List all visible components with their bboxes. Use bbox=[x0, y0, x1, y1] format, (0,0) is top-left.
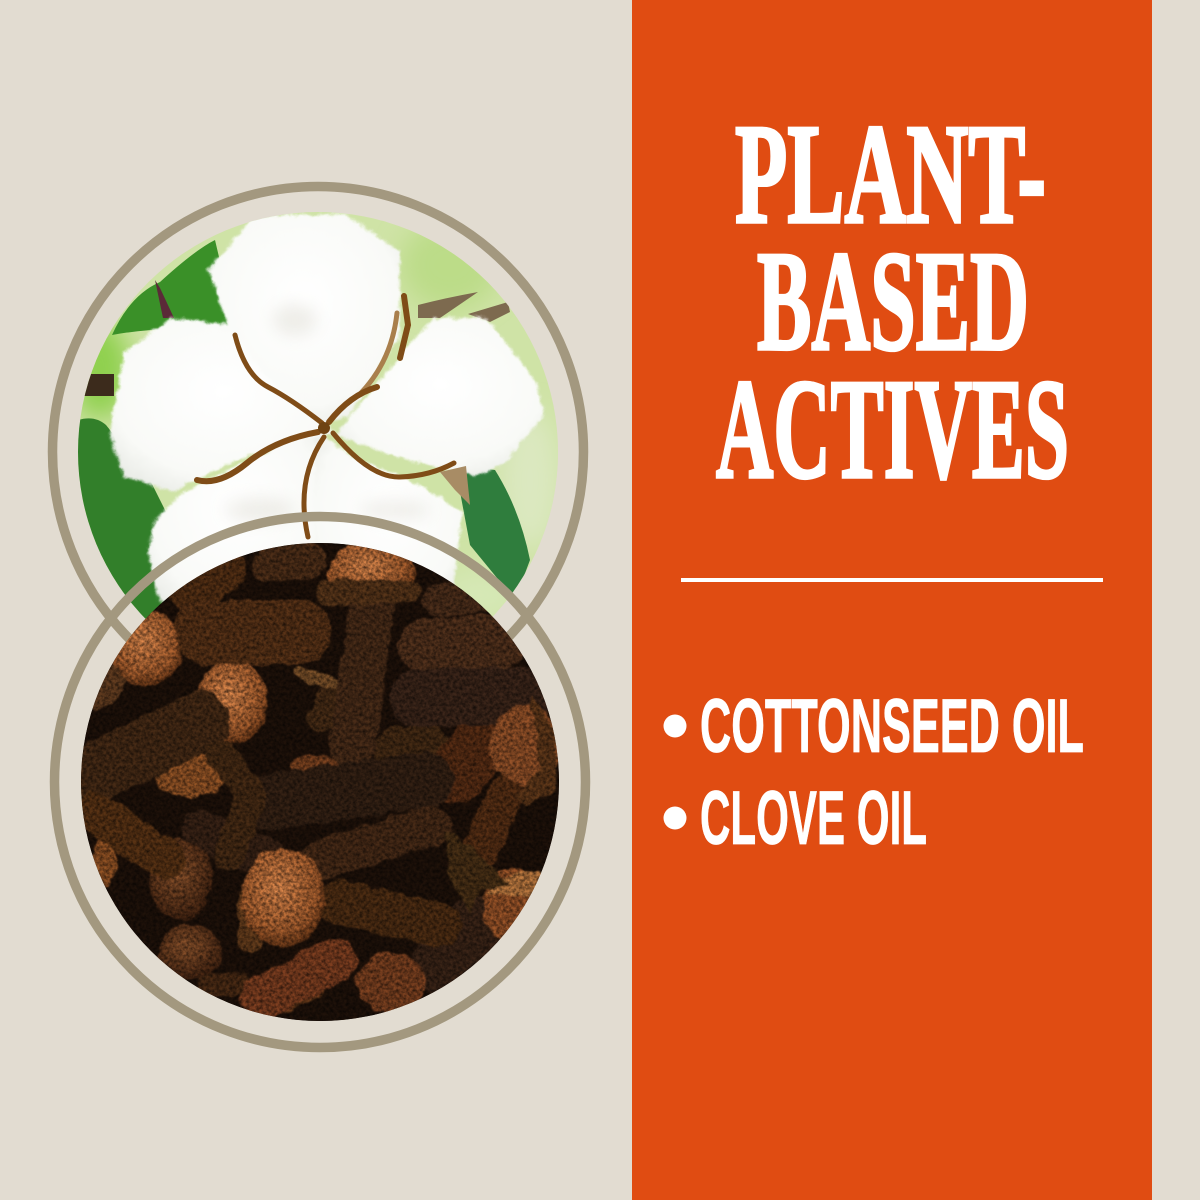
leaf: upper left bbox=[112, 240, 235, 335]
cloves: front buds bbox=[241, 847, 325, 947]
leaf: lower left bbox=[78, 418, 166, 619]
divider line bbox=[681, 578, 1103, 582]
photo: cotton boll on green foliage bbox=[78, 212, 558, 619]
branch bbox=[84, 374, 114, 396]
cotton shading bbox=[225, 304, 430, 522]
ring: clove circle outline bbox=[54, 516, 586, 1048]
heading: plant-based actives bbox=[716, 95, 1069, 508]
ring: cotton circle outline bbox=[52, 186, 584, 718]
list: clove oil: CLOVE OIL bbox=[700, 776, 927, 861]
cloves: stems bbox=[95, 592, 440, 925]
cloves: crown detail bbox=[445, 830, 510, 915]
list: clove oil bbox=[664, 776, 927, 861]
husk: right bbox=[440, 466, 470, 505]
leaf: lower right bbox=[460, 469, 530, 592]
cloves: back layer bbox=[100, 560, 525, 985]
photo: dried cloves bbox=[70, 530, 570, 1030]
cloves: foreground stem bbox=[262, 960, 335, 998]
cotton husk strands bbox=[197, 296, 454, 537]
husk: center bbox=[318, 422, 330, 434]
cloves: buds bbox=[154, 753, 226, 797]
twigs bbox=[418, 292, 510, 322]
thorn bbox=[155, 280, 174, 318]
panel: orange title panel bbox=[632, 0, 1152, 1200]
cotton lobes bbox=[110, 214, 545, 620]
